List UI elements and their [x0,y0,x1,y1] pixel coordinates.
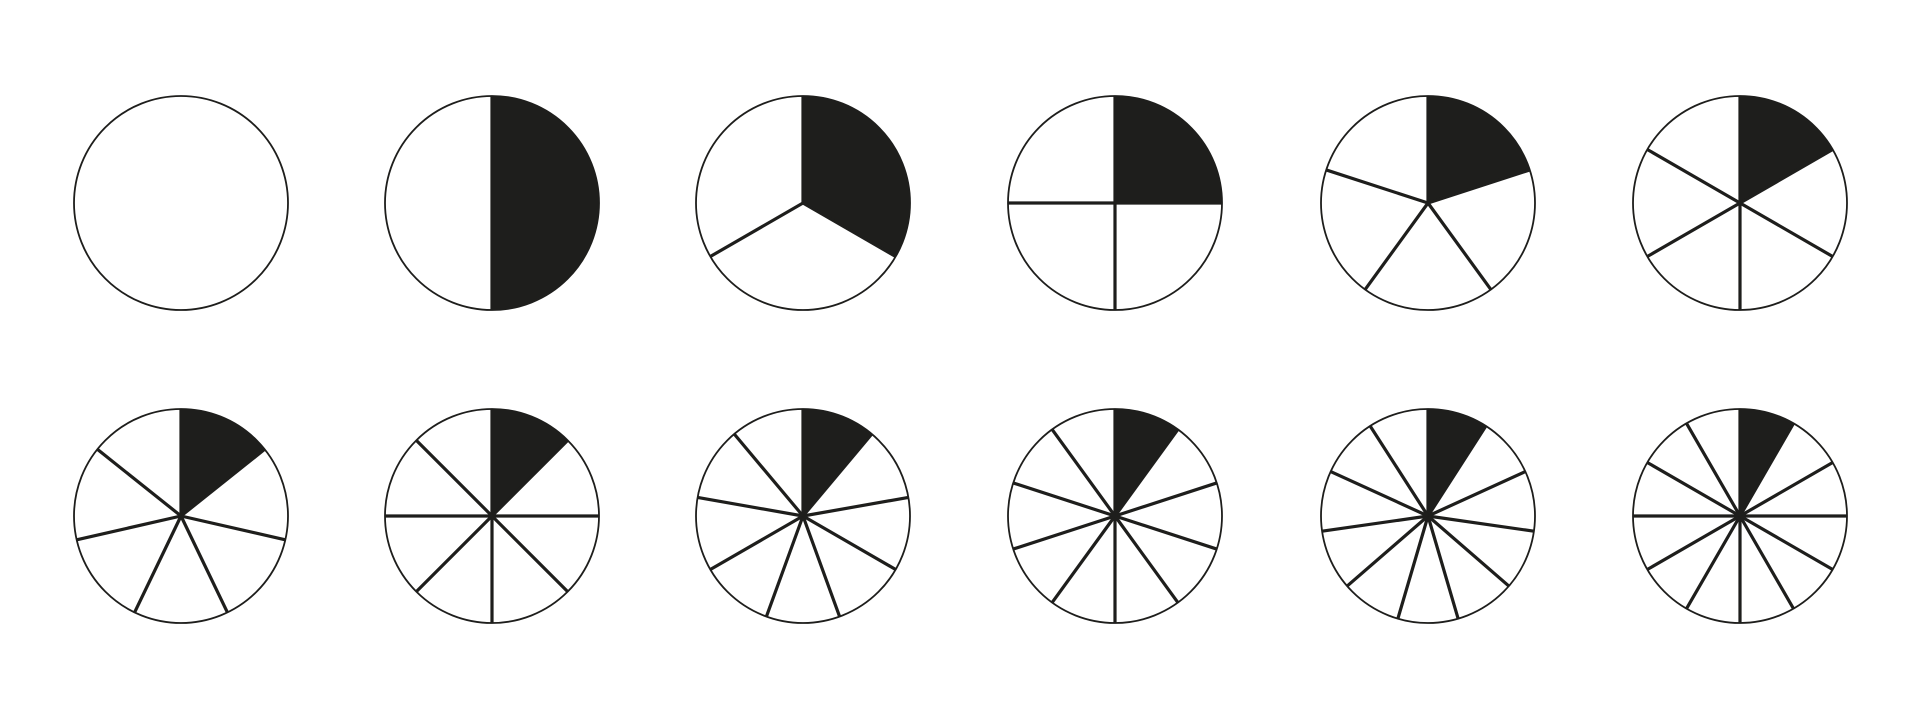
pie: 1/5 [1321,96,1535,310]
pie: 1/4 [1008,96,1222,310]
pie: 1/7 [74,409,288,623]
pie: 1/9 [696,409,910,623]
pie: 1/11 [1321,409,1535,623]
pie: 1/6 [1633,96,1847,310]
pie: 1/2 [385,96,599,310]
pie: 1/8 [385,409,599,623]
pie: whole circle [74,96,288,310]
pie: 1/12 [1633,409,1847,623]
pie: 1/10 [1008,409,1222,623]
pie: 1/3 [696,96,910,310]
